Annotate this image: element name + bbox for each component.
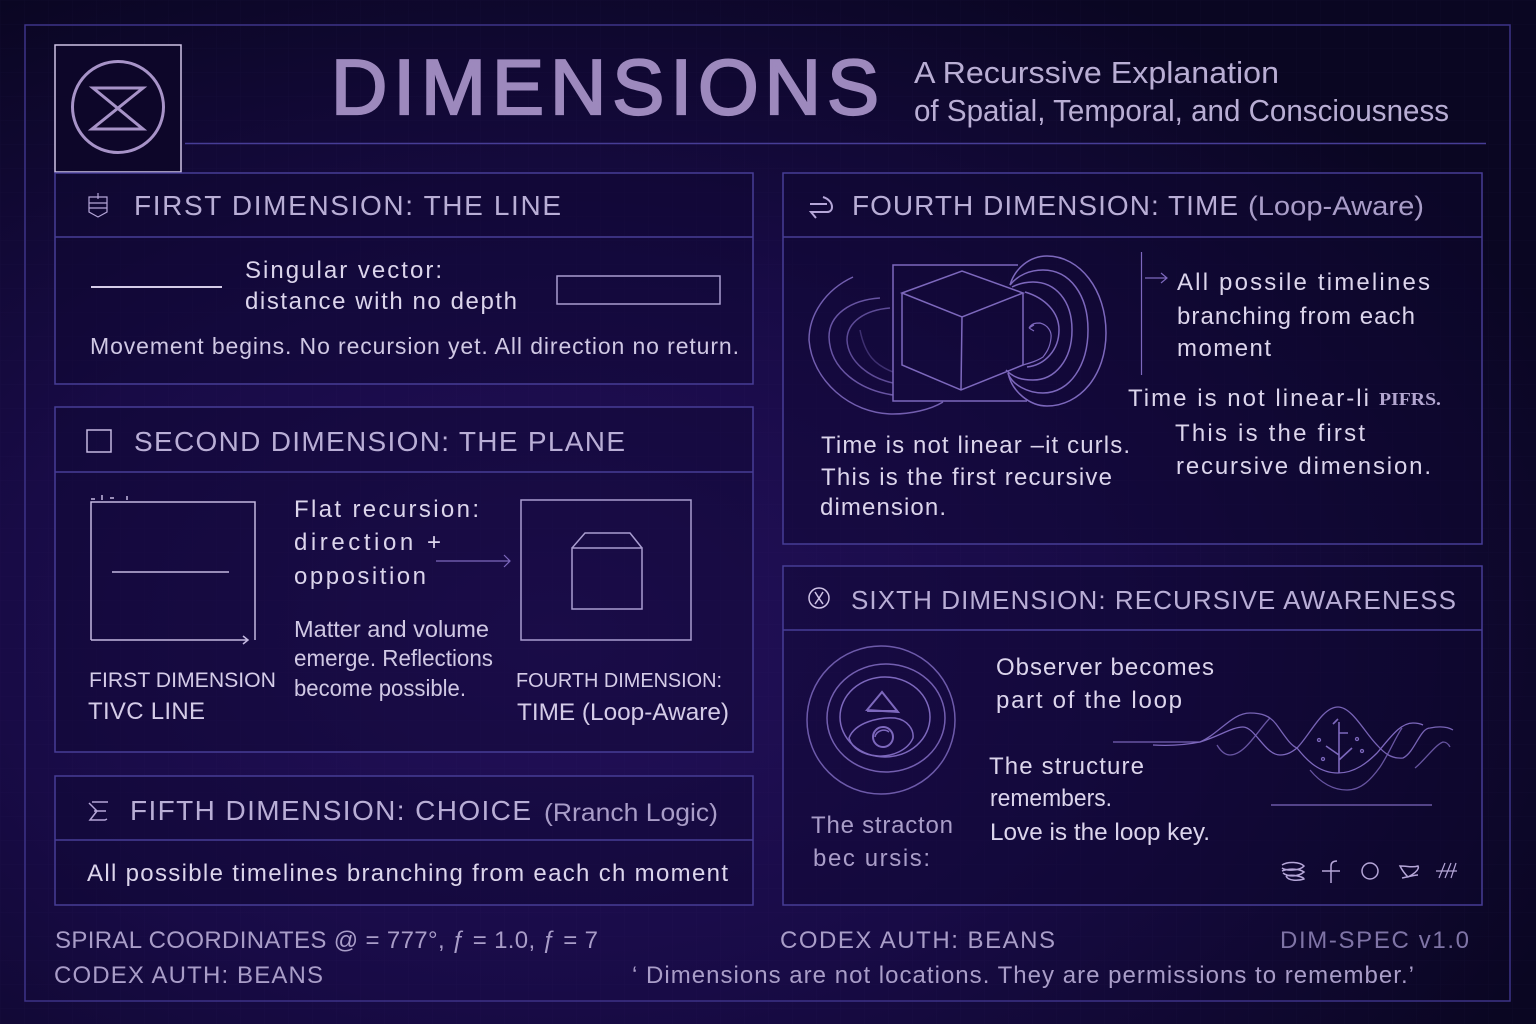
icon: circled x bbox=[809, 588, 829, 608]
text: matter and volume: become possible. bbox=[294, 675, 466, 701]
subtitle: of Spatial, Temporal, and Consciousness bbox=[914, 93, 1449, 128]
heading: fourth dimension: (Loop-Aware) bbox=[1248, 191, 1424, 221]
text: flat recursion: Flat recursion: bbox=[294, 496, 479, 523]
heading: fifth dimension bbox=[130, 795, 718, 827]
text: the structure remembers: The structure bbox=[989, 753, 1144, 780]
label: fourth dimension time: FOURTH DIMENSION: bbox=[516, 670, 722, 692]
icon row: symbols bbox=[1282, 861, 1457, 883]
diagram: waves with tree bbox=[1113, 707, 1453, 805]
text: time is not linear, left: This is the first recursive bbox=[821, 464, 1112, 491]
heading: fourth dimension bbox=[852, 190, 1424, 221]
text: singular vector bbox=[245, 257, 517, 315]
text: flat recursion bbox=[294, 496, 479, 590]
heading: second dimension: SECOND DIMENSION: THE PLANE bbox=[134, 426, 625, 457]
label: fourth dimension time: TIME (Loop-Aware) bbox=[517, 699, 729, 726]
text: movement begins: Movement begins. No recursion yet. All direction no return. bbox=[90, 333, 739, 359]
panel: sixth dimension bbox=[783, 566, 1482, 905]
diagram: eye within concentric rings bbox=[807, 646, 955, 794]
text: all possible timelines: All possible timelines branching from each ch moment bbox=[87, 860, 728, 887]
text: time is not linear, right: recursive dimension. bbox=[1176, 453, 1431, 480]
subtitle bbox=[914, 55, 1449, 128]
text: time is not linear, left: dimension. bbox=[820, 494, 946, 521]
text: observer: Observer becomes bbox=[996, 654, 1214, 681]
text: all possile timelines: All possile timelines bbox=[1177, 269, 1430, 296]
label: first dimension line bbox=[88, 669, 276, 725]
text: time is not linear, right: This is the first bbox=[1175, 420, 1365, 447]
heading: first dimension: FIRST DIMENSION: THE LINE bbox=[134, 190, 561, 221]
icon: first dimension glyph bbox=[89, 193, 107, 217]
footer: codex auth center: CODEX AUTH: BEANS bbox=[780, 927, 1055, 954]
text: the stracton bbox=[811, 812, 953, 872]
text: observer bbox=[996, 654, 1214, 714]
text: all possile timelines bbox=[1177, 269, 1430, 362]
line sample bbox=[91, 286, 222, 288]
diagram: line in frame bbox=[91, 495, 255, 644]
text: matter and volume: emerge. Reflections bbox=[294, 645, 493, 671]
text: the structure remembers: Love is the loop key. bbox=[990, 819, 1210, 846]
text: time is not linear, left: Time is not linear –it curls. bbox=[821, 432, 1130, 459]
footer: spiral coordinates: SPIRAL COORDINATES @ = 777°, ƒ = 1.0, ƒ = 7 bbox=[55, 927, 598, 954]
text: singular vector: Singular vector: bbox=[245, 257, 442, 284]
footer: codex auth left: CODEX AUTH: BEANS bbox=[54, 962, 323, 989]
text: observer: part of the loop bbox=[996, 687, 1182, 714]
text: singular vector: distance with no depth bbox=[245, 288, 517, 315]
heading: fourth dimension: FOURTH DIMENSION: TIME bbox=[852, 190, 1238, 221]
text: time is not linear, left bbox=[820, 432, 1130, 521]
icon: sigma bbox=[89, 802, 108, 820]
diagram: cube in frame bbox=[521, 500, 691, 640]
text: flat recursion: opposition bbox=[294, 563, 426, 590]
text: time is not linear, right bbox=[1128, 385, 1441, 480]
text: time is not linear, right: Time is not linear-li bbox=[1128, 385, 1369, 412]
text: all possile timelines: moment bbox=[1177, 335, 1271, 362]
logo: hourglass emblem bbox=[55, 45, 181, 172]
panel: second dimension bbox=[55, 407, 753, 752]
label: first dimension line: TIVC LINE bbox=[88, 698, 205, 725]
icon: loop arrows bbox=[810, 197, 832, 218]
text: flat recursion: direction + bbox=[294, 529, 441, 556]
panel: fifth dimension bbox=[55, 776, 753, 905]
footer: version: DIM-SPEC v1.0 bbox=[1280, 927, 1469, 954]
label: first dimension line: FIRST DIMENSION bbox=[89, 669, 276, 692]
text: the stracton: The stracton bbox=[811, 812, 953, 839]
panel: fourth dimension bbox=[783, 173, 1482, 544]
title: DIMENSIONS bbox=[331, 43, 879, 131]
divider arrow bbox=[1142, 252, 1167, 375]
text: matter and volume: Matter and volume bbox=[294, 616, 489, 642]
panel: first dimension bbox=[55, 173, 753, 384]
footer: quote: ‘ Dimensions are not locations. They are permissions to remember.’ bbox=[632, 962, 1414, 989]
text: the stracton: bec ursis: bbox=[813, 845, 930, 872]
heading: sixth dimension: SIXTH DIMENSION: RECURSIVE AWARENESS bbox=[851, 585, 1456, 615]
text: all possile timelines: branching from each bbox=[1177, 303, 1415, 330]
text: matter and volume bbox=[294, 616, 493, 701]
diagram: cube with curling loops bbox=[809, 256, 1106, 414]
arrow: to cube frame bbox=[436, 555, 510, 567]
label: fourth dimension time bbox=[516, 670, 729, 726]
heading: fifth dimension: (Rranch Logic) bbox=[544, 799, 718, 827]
icon: square bbox=[87, 430, 111, 452]
subtitle: A Recurssive Explanation bbox=[914, 55, 1279, 90]
text: the structure remembers: remembers. bbox=[990, 785, 1112, 812]
text: the structure remembers bbox=[989, 753, 1210, 846]
heading: fifth dimension: FIFTH DIMENSION: CHOICE bbox=[130, 795, 531, 826]
text: time is not linear, right: PIFRS. bbox=[1379, 389, 1441, 409]
rectangle sample bbox=[557, 276, 720, 304]
